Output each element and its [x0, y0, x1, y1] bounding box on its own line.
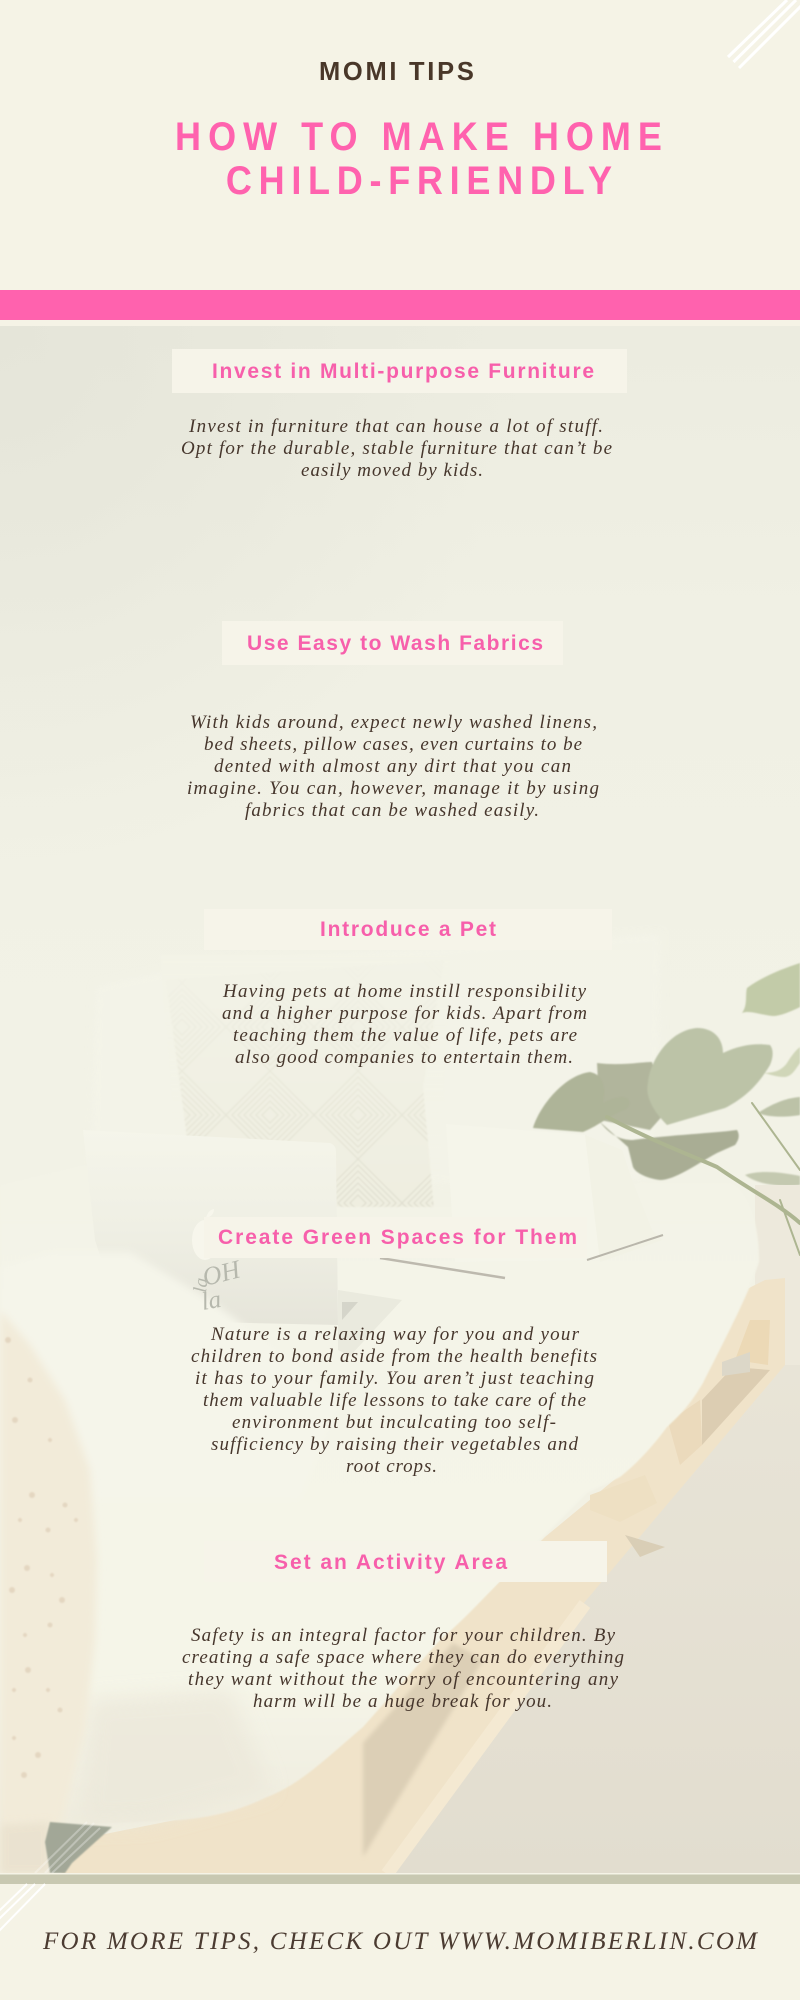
photo: dark gap under bed: [45, 1822, 112, 1873]
body text 4: Nature is a relaxing way for you and your: [210, 1324, 580, 1345]
body text 4: children to bond aside from the health benefits: [191, 1346, 597, 1367]
body text 3: [222, 981, 587, 1068]
photo: plant stems: [607, 1103, 800, 1255]
photo: diamond pillow: [160, 955, 450, 1215]
photo: laptop sticker: la: [190, 1277, 212, 1293]
section 3: [204, 909, 612, 1068]
heading box 1: [172, 349, 627, 393]
heading box 3: [204, 909, 612, 950]
footer call to action: FOR MORE TIPS, CHECK OUT WWW.MOMIBERLIN.COM: [42, 1928, 758, 1955]
photo: back pillow: [90, 932, 662, 1190]
section 4: [191, 1217, 597, 1477]
body text 1: [181, 416, 612, 481]
title: HOW TO MAKE HOME: [175, 115, 662, 159]
heading box 4: [204, 1217, 587, 1258]
body text 1: Invest in furniture that can house a lot of stuff.: [188, 416, 603, 437]
section 5: [182, 1541, 624, 1712]
title: [175, 115, 662, 203]
decorative corner lines bottom left: [0, 1884, 45, 1931]
heading 4: Create Green Spaces for Them: [218, 1226, 577, 1249]
photo: laptop sticker: la: [199, 1286, 223, 1316]
photo: plant leaves: [533, 963, 800, 1186]
photo: laptop sticker: [190, 1254, 244, 1316]
body text 2: With kids around, expect newly washed linens,: [190, 712, 597, 733]
body text 5: they want without the worry of encountering any: [188, 1669, 619, 1690]
photo: front duvet lump: [0, 1252, 340, 1500]
body text 1: easily moved by kids.: [301, 460, 483, 481]
body text 5: [182, 1625, 624, 1712]
heading 5: Set an Activity Area: [274, 1551, 507, 1574]
body text 2: imagine. You can, however, manage it by using: [187, 778, 599, 799]
photo: white duvet: [0, 1165, 759, 1825]
photo: floor: [387, 1365, 800, 1874]
photo: wooden pallet: [60, 1278, 785, 1874]
body text 2: bed sheets, pillow cases, even curtains to be: [204, 734, 582, 755]
photo: wall right of bed: [755, 1185, 800, 1370]
body text 1: Opt for the durable, stable furniture that can’t be: [181, 438, 612, 459]
decorative corner lines top right: [728, 0, 800, 68]
body text 4: root crops.: [346, 1456, 437, 1477]
body text 2: fabrics that can be washed easily.: [245, 800, 539, 821]
photo: laptop: [83, 1130, 402, 1356]
heading 1: Invest in Multi-purpose Furniture: [212, 360, 594, 383]
body text 4: [191, 1324, 597, 1477]
header background: [0, 0, 800, 326]
decorative lines over photo bottom left: [35, 1822, 100, 1873]
body text 5: Safety is an integral factor for your children. By: [191, 1625, 616, 1646]
heading 3: Introduce a Pet: [320, 918, 496, 941]
footer background: [0, 1873, 800, 2000]
photo: knitted throw: [0, 1310, 97, 1874]
pink divider band: [0, 290, 800, 320]
section 2: [187, 621, 599, 821]
body text 4: it has to your family. You aren’t just teaching: [195, 1368, 594, 1389]
body text 3: teaching them the value of life, pets are: [233, 1025, 577, 1046]
photo: open book: [380, 1124, 663, 1278]
body text 5: creating a safe space where they can do everything: [182, 1647, 624, 1668]
body text 4: them valuable life lessons to take care of the: [203, 1390, 586, 1411]
background photo: bedroom scene: [0, 326, 800, 1874]
body text 5: harm will be a huge break for you.: [253, 1691, 552, 1712]
body text 4: environment but inculcating too self-: [232, 1412, 556, 1433]
eyebrow: Momi Tips: MOMI TIPS: [319, 58, 474, 86]
body text 4: sufficiency by raising their vegetables and: [211, 1434, 578, 1455]
heading 2: Use Easy to Wash Fabrics: [247, 632, 543, 655]
body text 2: dented with almost any dirt that you can: [214, 756, 571, 777]
photo: duvet lower shadow: [80, 1690, 270, 1825]
body text 3: Having pets at home instill responsibility: [222, 981, 587, 1002]
title: CHILD-FRIENDLY: [226, 159, 612, 203]
photo: laptop sticker: OH: [199, 1254, 244, 1292]
heading box 5: [204, 1541, 607, 1582]
body text 3: and a higher purpose for kids. Apart from: [222, 1003, 587, 1024]
body text 2: [187, 712, 599, 821]
body text 3: also good companies to entertain them.: [235, 1047, 573, 1068]
section 1: [172, 349, 627, 481]
heading box 2: [222, 621, 563, 665]
footer olive band: [0, 1874, 800, 1884]
